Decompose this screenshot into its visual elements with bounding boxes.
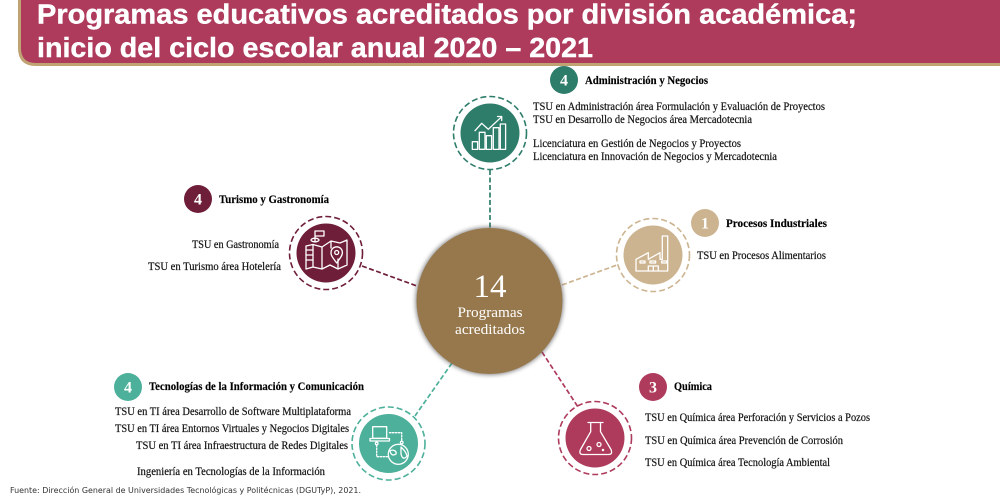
heading: Procesos Industriales xyxy=(726,218,828,230)
badge: count 4: 4 xyxy=(194,192,202,208)
icon: laboratory flask xyxy=(558,402,632,474)
panel: Procesos Industriales xyxy=(616,209,828,292)
icon: map with flag and pin xyxy=(290,216,362,290)
hub label: acreditados xyxy=(455,322,525,338)
program list: TSU en TI área Entornos Virtuales y Negocios Digitales xyxy=(115,423,349,435)
badge: count 4: 4 xyxy=(124,380,132,396)
heading: Turismo y Gastronomía xyxy=(219,194,329,206)
badge: count 3 xyxy=(639,373,667,401)
title: inicio del ciclo escolar anual 2020 – 2021 xyxy=(37,32,593,63)
program list: TSU en Química área Prevención de Corrosión xyxy=(645,435,843,447)
heading: Química xyxy=(674,381,712,393)
badge: count 4 xyxy=(550,66,578,94)
badge: count 4: 4 xyxy=(560,72,568,90)
icon: laptop connected to globe xyxy=(352,407,425,480)
icon: bar chart with rising arrow xyxy=(454,96,526,170)
badge: count 4 xyxy=(114,373,142,401)
program list: TSU en Gastronomía xyxy=(192,239,279,251)
hub label: Programas xyxy=(458,305,523,321)
title banner xyxy=(18,0,1000,66)
panel: Administración y Negocios xyxy=(454,66,825,170)
source note: Fuente: Dirección General de Universidades Tecnológicas y Politécnicas (DGUTyP), 2021. xyxy=(10,485,361,495)
badge: count 1: 1 xyxy=(701,216,709,232)
program list: TSU en Procesos Alimentarios xyxy=(697,250,826,262)
program list: TSU en Química área Perforación y Servicios a Pozos xyxy=(645,412,870,424)
program list: Ingeniería en Tecnologías de la Información xyxy=(137,466,325,478)
program list: Licenciatura en Innovación de Negocios y Mercadotecnia xyxy=(533,151,777,163)
badge: count 1 xyxy=(691,209,719,237)
program list: TSU en Química área Tecnología Ambiental xyxy=(645,457,830,469)
badge: count 4 xyxy=(184,185,212,213)
icon: factory xyxy=(616,218,690,292)
program list: TSU en TI área Infraestructura de Redes Digitales xyxy=(136,440,348,452)
program list: TSU en Desarrollo de Negocios área Mercadotecnia xyxy=(533,114,752,126)
hub number: 14 xyxy=(474,269,506,305)
program list: Licenciatura en Gestión de Negocios y Proyectos xyxy=(533,138,741,150)
panel: Turismo y Gastronomía xyxy=(148,185,362,290)
panel: Tecnologías de la Información y Comunicación xyxy=(114,373,425,480)
heading: Administración y Negocios xyxy=(585,75,708,87)
badge: count 3: 3 xyxy=(649,380,657,396)
program list: TSU en Turismo área Hotelería xyxy=(148,261,281,273)
central hub: 14 programas acreditados xyxy=(416,227,564,375)
panel: Química xyxy=(558,373,870,474)
connectors from hub to divisions xyxy=(362,170,617,416)
heading: Tecnologías de la Información y Comunicación xyxy=(149,381,365,393)
program list: TSU en Administración área Formulación y Evaluación de Proyectos xyxy=(533,101,825,113)
program list: TSU en TI área Desarrollo de Software Multiplataforma xyxy=(115,406,351,418)
